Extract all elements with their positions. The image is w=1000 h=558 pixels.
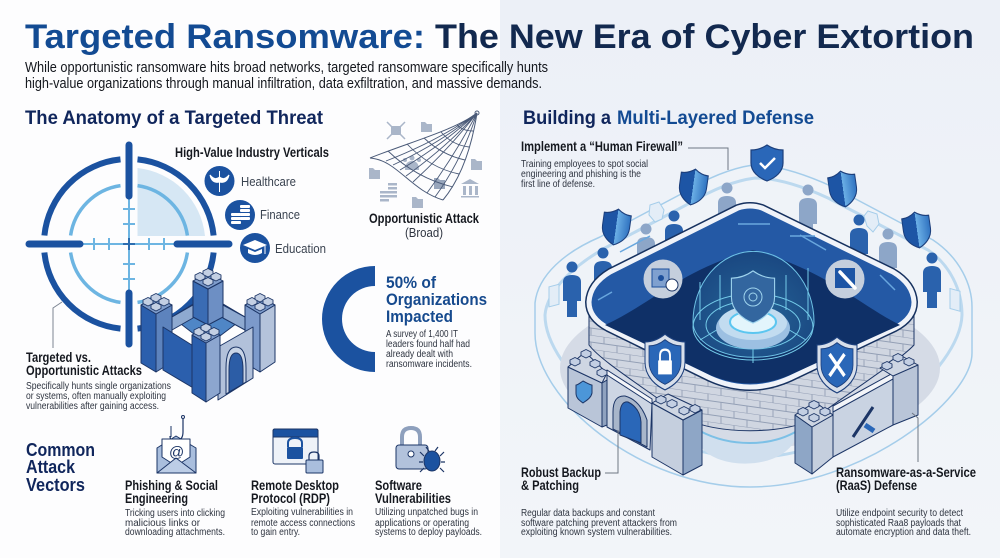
leader: target callout bbox=[53, 302, 62, 348]
leader: human firewall bbox=[688, 148, 728, 170]
icon: phishing envelope bbox=[157, 416, 196, 473]
heading: common attack vectors bbox=[26, 440, 95, 495]
text: targeted vs opportunistic: Targeted vs. bbox=[26, 350, 91, 365]
subtitle: While opportunistic ransomware hits broad networks, targeted ransomware specifically hunts bbox=[25, 59, 548, 76]
text: software vulnerabilities: Software bbox=[375, 478, 422, 493]
item: education bbox=[240, 233, 326, 263]
callout: human firewall: first line of defense. bbox=[521, 179, 595, 190]
stat: 50% of organizations: ransomware incidents. bbox=[386, 359, 472, 370]
left tower bbox=[141, 294, 172, 372]
subtitle: high-value organizations through manual infiltration, data exfiltration, and massive demands. bbox=[25, 75, 542, 92]
item: healthcare bbox=[204, 166, 296, 196]
heading: common attack vectors: Common bbox=[26, 440, 95, 460]
title: The New Era of Cyber Extortion bbox=[435, 18, 974, 56]
perimeter shields bbox=[600, 145, 933, 250]
heading: defense: Multi-Layered Defense bbox=[617, 108, 814, 129]
callout: robust backup: exploiting known system vulnerabilities. bbox=[521, 527, 672, 538]
icon: phishing envelope: @ bbox=[169, 444, 184, 461]
net mesh bbox=[370, 113, 477, 200]
text: phishing bbox=[125, 478, 225, 538]
heading: common attack vectors: Attack bbox=[26, 457, 76, 477]
item: healthcare: Healthcare bbox=[241, 174, 296, 189]
stat: 50% of organizations: already dealt with bbox=[386, 349, 453, 360]
icon: lock shield bbox=[645, 334, 685, 390]
callout: raas defense bbox=[836, 465, 976, 538]
callout: robust backup: Robust Backup bbox=[521, 465, 601, 480]
text: RDP: to gain entry. bbox=[251, 527, 300, 538]
icon: software padlock and bug bbox=[396, 428, 445, 472]
text: phishing: Tricking users into clicking bbox=[125, 508, 225, 519]
chart: target reticle bbox=[29, 145, 229, 344]
text: software vulnerabilities: Vulnerabilities bbox=[375, 491, 451, 506]
text: RDP: Protocol (RDP) bbox=[251, 491, 330, 506]
text: opportunistic attack: (Broad) bbox=[405, 225, 443, 240]
panel: industry verticals bbox=[175, 145, 329, 263]
text: RDP: remote access connections bbox=[251, 518, 355, 529]
inner courtyard bbox=[589, 206, 914, 387]
heading: defense: Building a bbox=[523, 108, 611, 129]
callout: raas defense: (RaaS) Defense bbox=[836, 478, 917, 493]
right tower bbox=[245, 294, 275, 372]
halo rings bbox=[535, 165, 972, 487]
back tower bbox=[193, 268, 223, 325]
callout: robust backup: Regular data backups and constant bbox=[521, 508, 655, 519]
subtitle bbox=[25, 59, 548, 92]
text: software vulnerabilities bbox=[375, 478, 482, 538]
stat: 50% of organizations: 50% of bbox=[386, 273, 436, 292]
text: opportunistic attack bbox=[369, 211, 479, 240]
stat: 50% of organizations: Impacted bbox=[386, 307, 453, 326]
text: software vulnerabilities: applications or operating bbox=[375, 518, 469, 529]
text: targeted vs opportunistic: vulnerabilities after gaining access. bbox=[26, 401, 159, 412]
heading: verticals: High-Value Industry Verticals bbox=[175, 145, 329, 160]
icon: castle bbox=[141, 268, 275, 402]
text: software vulnerabilities: Utilizing unpatched bugs in bbox=[375, 507, 478, 518]
callout: human firewall bbox=[521, 139, 683, 190]
people bbox=[563, 182, 941, 317]
callout: raas defense: Utilize endpoint security to detect bbox=[836, 508, 963, 519]
callout: robust backup: & Patching bbox=[521, 478, 579, 493]
stat: 50% of organizations: Organizations bbox=[386, 290, 487, 309]
callout: raas defense: sophisticated Raa8 payloads that bbox=[836, 518, 961, 529]
heading: defense bbox=[523, 108, 814, 129]
text: phishing: downloading attachments. bbox=[125, 527, 225, 538]
callout: robust backup: software patching prevent attackers from bbox=[521, 518, 677, 529]
gate towers left bbox=[568, 350, 702, 475]
text: phishing: Engineering bbox=[125, 491, 188, 506]
text: RDP: Remote Desktop bbox=[251, 478, 339, 493]
ghost documents bbox=[549, 202, 960, 311]
icon: backup vault bbox=[644, 260, 682, 298]
title: Targeted Ransomware: bbox=[25, 18, 425, 56]
text: targeted vs opportunistic: Specifically hunts single organizations bbox=[26, 381, 171, 392]
base ring front bbox=[700, 431, 797, 464]
icon: patching wrench bbox=[826, 260, 864, 298]
callout: human firewall: Training employees to spot social bbox=[521, 159, 648, 170]
title bbox=[25, 18, 974, 56]
icon: tools shield bbox=[817, 337, 857, 393]
callout: raas defense: Ransomware-as-a-Service bbox=[836, 465, 976, 480]
leader: backup bbox=[605, 430, 618, 473]
text: phishing: Phishing & Social bbox=[125, 478, 218, 493]
callout: raas defense: automate encryption and data theft. bbox=[836, 527, 971, 538]
text: targeted vs opportunistic bbox=[26, 350, 171, 412]
brick wall bbox=[589, 302, 914, 431]
leader: raas bbox=[912, 413, 918, 462]
net icons bbox=[369, 122, 482, 208]
heading: anatomy: The Anatomy of a Targeted Threat bbox=[25, 108, 324, 129]
text: RDP bbox=[251, 478, 355, 538]
central dome bbox=[693, 251, 814, 363]
stat: 50% of organizations: A survey of 1,400 IT bbox=[386, 329, 458, 340]
callout: robust backup bbox=[521, 465, 677, 538]
background: left panel bbox=[0, 0, 500, 558]
gate towers right bbox=[795, 354, 918, 474]
text: targeted vs opportunistic: Opportunistic Attacks bbox=[26, 363, 142, 378]
diagram: layered fortress bbox=[535, 145, 972, 487]
item: finance bbox=[225, 200, 300, 230]
chart: half donut 50% bbox=[322, 266, 375, 372]
stat: 50% of organizations bbox=[386, 273, 487, 370]
heading: common attack vectors: Vectors bbox=[26, 475, 85, 495]
text: opportunistic attack: Opportunistic Attack bbox=[369, 211, 479, 226]
background: right panel bbox=[500, 0, 1000, 558]
front tower bbox=[192, 324, 220, 402]
text: RDP: Exploiting vulnerabilities in bbox=[251, 507, 353, 518]
text: software vulnerabilities: systems to deploy payloads. bbox=[375, 527, 482, 538]
callout: human firewall: Implement a “Human Firewall” bbox=[521, 139, 683, 154]
icon: remote desktop window bbox=[273, 429, 323, 473]
stat: 50% of organizations: leaders found half had bbox=[386, 339, 470, 350]
item: education: Education bbox=[275, 241, 326, 256]
text: phishing: malicious links or bbox=[125, 518, 201, 529]
item: finance: Finance bbox=[260, 207, 300, 222]
icon: opportunistic net bbox=[369, 111, 482, 208]
text: targeted vs opportunistic: or systems, often manually exploiting bbox=[26, 391, 166, 402]
callout: human firewall: engineering and phishing is the bbox=[521, 169, 641, 180]
